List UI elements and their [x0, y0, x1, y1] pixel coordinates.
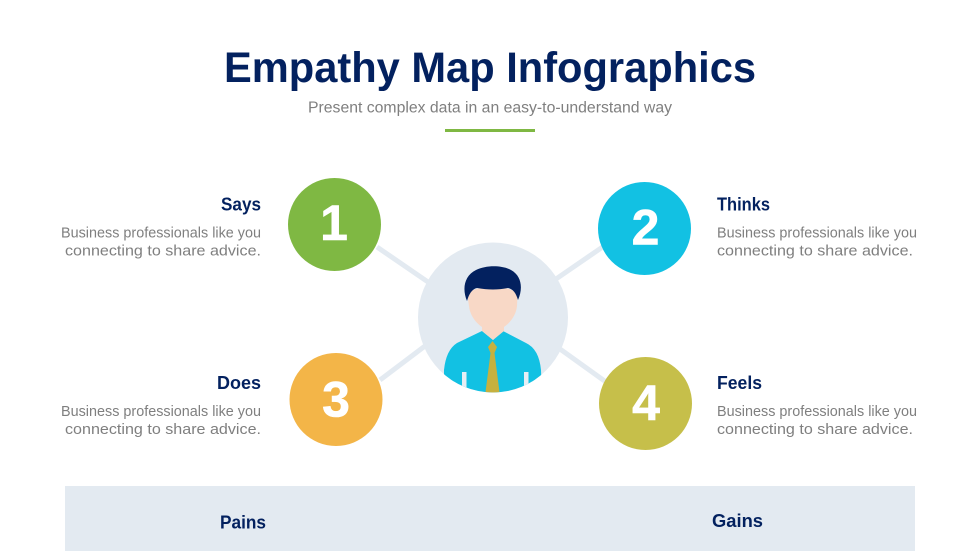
circle 4: 4 — [632, 375, 660, 431]
subtitle: Present complex data in an easy-to-understand way — [308, 100, 672, 116]
avatar face — [468, 287, 518, 331]
title: Empathy Map Infographics — [224, 44, 756, 92]
pains label: Pains — [220, 512, 266, 532]
text block: says: connecting to share advice. — [65, 242, 261, 260]
circle 2 — [598, 182, 691, 275]
circle 1 — [288, 178, 381, 271]
text block: does — [61, 372, 261, 438]
text block: feels — [717, 372, 917, 438]
text block: thinks — [717, 194, 917, 260]
avatar body — [444, 327, 542, 392]
text block: feels: Feels — [717, 372, 762, 393]
circle 2: 2 — [632, 200, 659, 256]
central avatar — [418, 242, 568, 400]
text block: thinks: connecting to share advice. — [717, 242, 913, 260]
text block: does: Business professionals like you — [61, 403, 261, 420]
text block: feels: Business professionals like you — [717, 403, 917, 420]
text block: says — [61, 194, 261, 260]
circle 3: 3 — [322, 372, 350, 428]
text block: thinks: Thinks — [717, 194, 770, 214]
gains label: Gains — [712, 510, 763, 531]
avatar tie — [486, 341, 500, 392]
text block: does: connecting to share advice. — [65, 421, 261, 438]
title underline — [445, 129, 535, 132]
text block: does: Does — [217, 372, 261, 393]
connector lines — [377, 246, 606, 382]
text block: says: Business professionals like you — [61, 224, 261, 242]
avatar hair — [464, 266, 521, 301]
avatar neck — [482, 327, 504, 340]
avatar background circle — [418, 242, 568, 392]
avatar arm lines — [462, 372, 466, 388]
text block: says: Says — [221, 194, 261, 214]
text block: feels: connecting to share advice. — [717, 421, 913, 438]
bottom panel — [65, 486, 915, 551]
circle 1: 1 — [320, 195, 348, 251]
text block: thinks: Business professionals like you — [717, 224, 917, 242]
circle 3 — [290, 353, 382, 446]
circle 4 — [599, 357, 692, 450]
